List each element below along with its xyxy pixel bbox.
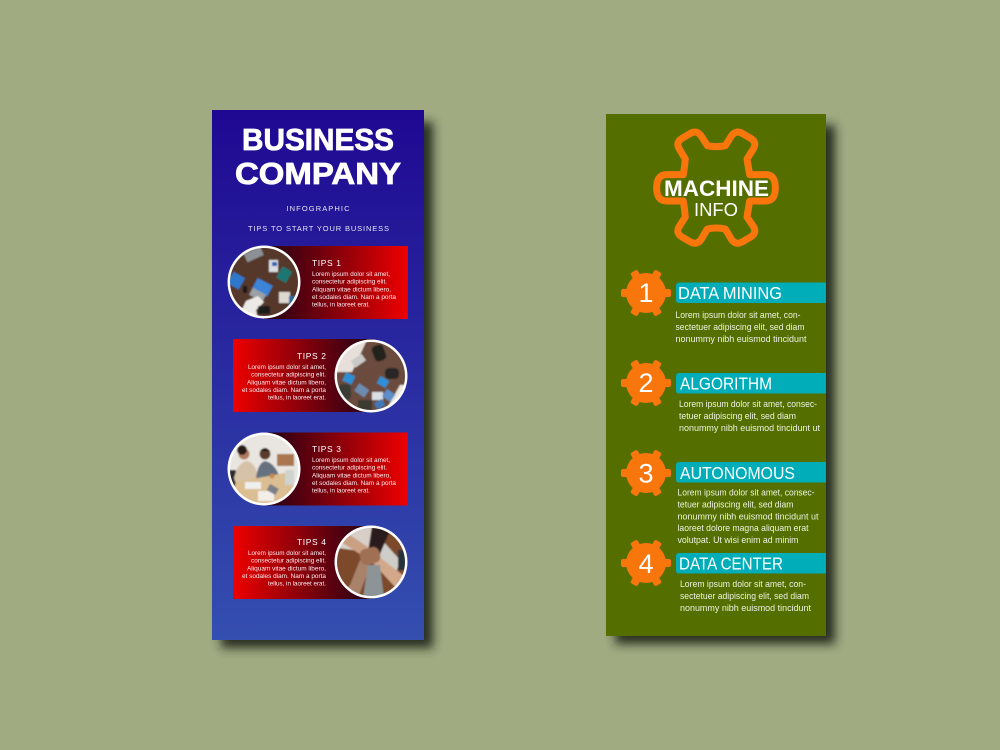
heading: ALGORITHM: [680, 374, 772, 394]
panel shadow: [221, 122, 433, 648]
tip 3 text: et sodales diam. Nam a porta: [312, 480, 396, 487]
tip 3 text: consectetur adipiscing elit.: [312, 465, 387, 472]
tip 4 text: Lorem ipsum dolor sit amet,: [248, 550, 326, 557]
description: sectetuer adipiscing elit, sed diam: [676, 322, 805, 333]
description: Lorem ipsum dolor sit amet, consec-: [678, 488, 814, 498]
tip 2: [233, 339, 408, 412]
description: [680, 579, 811, 614]
tip 2 text: consectetur adipiscing elit.: [251, 372, 326, 379]
tip 1 text: Lorem ipsum dolor sit amet,: [312, 271, 390, 278]
panel: business company: [212, 110, 433, 648]
gear title: [664, 176, 769, 220]
panel shadow: [615, 125, 835, 644]
description: nonummy nibh euismod tincidunt: [680, 603, 811, 614]
photo: hands stacked together: [334, 526, 408, 598]
icon: gear 1: 1: [638, 278, 654, 308]
tip 4 text: et sodales diam. Nam a porta: [242, 573, 326, 580]
heading: DATA CENTER: [679, 554, 783, 574]
tip 1 text: et sodales diam. Nam a porta: [312, 294, 396, 301]
tip 4 text: [242, 537, 327, 588]
panel background: [212, 110, 424, 640]
section 4: [621, 539, 826, 614]
section 2: [621, 359, 826, 434]
tip 1 text: [312, 258, 396, 309]
photo: colleagues at a meeting: [228, 432, 300, 506]
heading bar: [676, 282, 826, 303]
title: BUSINESS: [242, 122, 394, 157]
panel background: [606, 114, 826, 636]
description: sectetuer adipiscing elit, sed diam: [680, 591, 809, 602]
tip 1 text: tellus, in laoreet erat.: [312, 302, 370, 309]
tip 4 text: Aliquam vitae dictum libero,: [247, 565, 326, 572]
tip 2 text: et sodales diam. Nam a porta: [242, 387, 326, 394]
photo: team around table: [334, 340, 408, 412]
tip 3 text: TIPS 3: [312, 444, 342, 454]
description: nonummy nibh euismod tincidunt ut: [678, 512, 819, 522]
description: laoreet dolore magna aliquam erat: [678, 523, 809, 534]
tip 3 text: tellus, in laoreet erat.: [312, 488, 370, 495]
tip 3 text: Aliquam vitae dictum libero,: [312, 472, 391, 479]
tip 1: [227, 246, 408, 320]
icon: gear 3: [621, 449, 671, 497]
description: Lorem ipsum dolor sit amet, con-: [676, 310, 800, 321]
description: tetuer adipiscing elit, sed diam: [678, 500, 794, 510]
tip 2 text: TIPS 2: [297, 351, 327, 361]
description: tetuer adipiscing elit, sed diam: [679, 411, 796, 422]
tip 1 text: consectetur adipiscing elit.: [312, 279, 387, 286]
icon: large gear outline: [657, 132, 775, 243]
icon: gear 1: [621, 269, 671, 317]
tip 1 text: TIPS 1: [312, 258, 342, 268]
description: Lorem ipsum dolor sit amet, con-: [680, 579, 806, 590]
description: [679, 399, 820, 434]
icon: gear 2: [621, 359, 671, 407]
tip 4 text: tellus, in laoreet erat.: [268, 581, 326, 588]
title: [235, 122, 401, 191]
description: volutpat. Ut wisi enim ad minim: [678, 535, 799, 546]
section 3: [621, 449, 826, 546]
icon: gear 4: 4: [638, 549, 654, 579]
panel: machine info: [606, 114, 835, 644]
icon: gear 2: 2: [638, 368, 654, 398]
subtitle: TIPS TO START YOUR BUSINESS: [248, 224, 389, 233]
subtitle: [248, 204, 389, 233]
title: COMPANY: [235, 156, 401, 191]
tip 1 text: Aliquam vitae dictum libero,: [312, 286, 391, 293]
tip 2 text: tellus, in laoreet erat.: [268, 395, 326, 402]
tip 2 text: Lorem ipsum dolor sit amet,: [248, 364, 326, 371]
tip 4: [233, 526, 408, 599]
tip 2 text: [242, 351, 327, 402]
description: [678, 488, 819, 546]
description: nonummy nibh euismod tincidunt ut: [679, 423, 820, 434]
heading bar: [676, 373, 826, 394]
heading bar: [676, 462, 826, 482]
tip 4 text: consectetur adipiscing elit.: [251, 558, 326, 565]
tip 3 text: Lorem ipsum dolor sit amet,: [312, 457, 390, 464]
tip 3: [228, 432, 408, 506]
description: nonummy nibh euismod tincidunt: [676, 334, 807, 345]
heading bar: [676, 553, 826, 574]
tip 3 text: [312, 444, 396, 495]
section 1: [621, 269, 826, 345]
description: [676, 310, 807, 345]
subtitle: INFOGRAPHIC: [286, 204, 350, 213]
icon: gear 4: [621, 539, 671, 587]
gear title: INFO: [694, 200, 738, 220]
heading: AUTONOMOUS: [680, 463, 795, 483]
tip 2 text: Aliquam vitae dictum libero,: [247, 379, 326, 386]
tip 4 text: TIPS 4: [297, 537, 327, 547]
heading: DATA MINING: [678, 283, 782, 303]
description: Lorem ipsum dolor sit amet, consec-: [679, 399, 817, 410]
icon: gear 3: 3: [638, 458, 654, 488]
photo: team desk overhead: [227, 246, 300, 320]
gear title: MACHINE: [664, 176, 769, 201]
